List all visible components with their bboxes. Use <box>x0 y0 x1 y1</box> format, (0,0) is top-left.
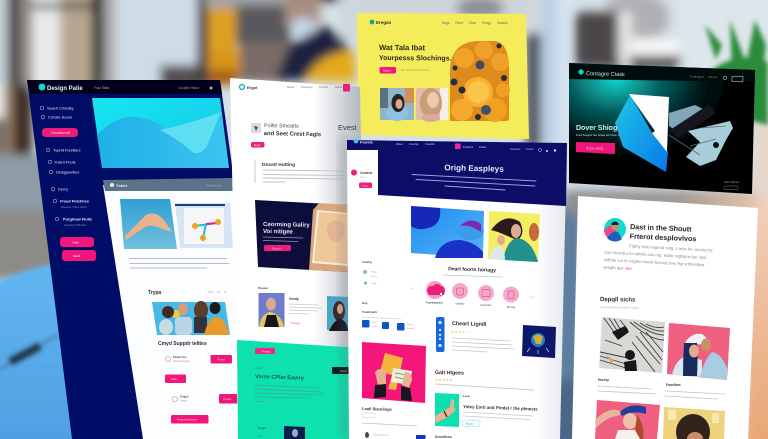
left column article <box>362 406 426 439</box>
centre page nav: Rdue <box>396 142 403 146</box>
yellow panel heading <box>379 43 452 63</box>
right page image captions <box>598 378 725 399</box>
gallery article text: Leep <box>463 394 470 398</box>
panel: white article page <box>230 78 366 439</box>
panel: centre navy-header page <box>347 139 567 439</box>
dashboard sidebar buttons: Hallt <box>72 240 79 244</box>
article pink button: Beoys <box>254 144 261 147</box>
image: blonde woman portrait <box>416 88 448 122</box>
product review block <box>451 321 514 352</box>
right page heading: Frterot desplovlvos <box>630 231 697 243</box>
panel: navy dashboard <box>27 80 240 439</box>
centre page nav: Cuuptls <box>425 142 435 146</box>
inner page subheading: Cmyd Suppdr telites <box>158 341 207 347</box>
panel: right article page <box>572 196 758 439</box>
right page paragraph <box>603 242 714 275</box>
teal section heading: Vorse CPlar Eaviry <box>255 374 305 382</box>
shadow under centre panel <box>339 136 352 439</box>
black panel footer link: Fterv Meres <box>724 180 740 184</box>
article heading: Pollte Smeatts <box>264 123 299 130</box>
gallery article text: Dnortlless <box>435 435 452 439</box>
inner page list rows: Lnaest <box>180 400 188 402</box>
pen <box>0 335 58 369</box>
black panel nav: Contagyns Fleoss <box>690 75 718 79</box>
left column activity list <box>362 260 378 285</box>
right page paragraph: mdhde cut fe migtes Ihenle fuvrest fsny fsp srdimedsst <box>603 257 705 267</box>
dashboard sidebar menu: Crmste Suran <box>48 114 72 120</box>
dashboard sidebar menu: Seach Cmestig <box>47 106 73 110</box>
article quote block: Dnsatt Hutting <box>262 162 295 168</box>
image: couple on pink <box>667 323 730 380</box>
article page logo: Ergot <box>247 85 258 90</box>
right page paragraph: Cus rnotsdLinsr witthin can rop, tsotle ragtspra fsp. lqal <box>604 250 706 260</box>
black panel logo <box>578 69 625 78</box>
category icons: Bnrving <box>507 306 516 309</box>
left column blue tiles <box>362 301 414 330</box>
dashboard sidebar menu: Delogyneities <box>56 170 79 174</box>
dashboard sidebar menu: Purginsal Flutie <box>63 216 93 222</box>
image: clasped hands <box>120 199 177 249</box>
centre page logo: Fowsle <box>360 140 373 144</box>
product review block: Cheart Lignill <box>452 321 487 328</box>
article pink button <box>251 142 264 148</box>
left column blue tiles: Dop <box>362 301 368 305</box>
right page paragraph: Fipthy rtan hegmat rwtg, s mbs for convict lry <box>629 243 714 253</box>
dashboard nav: Couples Hanor <box>178 86 200 90</box>
inner page pink buttons <box>165 355 238 424</box>
inner page header: Ystter <box>116 183 128 188</box>
category icons: Fheetmiss <box>480 304 492 307</box>
inner page pink buttons: Puntse <box>217 358 226 362</box>
centre page sidebar badge <box>351 170 373 188</box>
dark feature card: Sopyote <box>272 247 281 250</box>
teal section footer: Todge <box>258 426 266 430</box>
image: woman with friends <box>380 88 414 121</box>
centre page title: Origh Easpleys <box>444 163 504 174</box>
inner page list rows: Flatset Iiss <box>173 355 187 359</box>
image: hand with thumb on teal <box>435 393 459 427</box>
category icons <box>410 281 534 309</box>
centre page nav <box>396 142 556 152</box>
left column blue tiles: Fust <box>372 321 376 324</box>
black panel heading: Dover Shiog <box>576 125 617 132</box>
centre page sidebar badge: Fsnds <box>362 185 367 187</box>
centre page sidebar badge: Pelifn <box>360 177 365 179</box>
panel: black product page <box>569 63 755 194</box>
left column activity list: Yrsqs <box>371 282 377 285</box>
article heading overflow: Evest <box>338 123 358 132</box>
inner page paragraph <box>129 258 229 268</box>
dashboard sidebar menu: Yusird Fhots <box>54 160 76 164</box>
left column activity list: Yelqss <box>371 272 378 274</box>
gallery article text <box>435 394 538 439</box>
left column blue tiles: Prudrhpark <box>362 310 378 314</box>
dashboard nav <box>94 86 212 90</box>
yellow panel outline button: Dot Soup Gapt Suplong <box>401 68 429 72</box>
blue vertical toolbar <box>436 317 444 352</box>
right page section heading <box>600 297 640 310</box>
yellow panel heading: Wat Tala Ibat <box>379 43 426 52</box>
panel: yellow food landing page <box>357 13 529 139</box>
centre page nav: Fmscr <box>526 147 534 151</box>
inner page list rows: Dmsoso Fyrtas <box>173 360 190 363</box>
category icons: Foaningsmass <box>426 302 444 304</box>
dashboard sidebar menu: Freud Fidchhes <box>60 198 89 204</box>
dashboard sidebar menu <box>40 106 93 227</box>
teal section footer: Frsst <box>258 435 263 438</box>
article people section: Veedy <box>289 297 299 301</box>
image: blue abstract shapes <box>411 206 484 258</box>
teal section footer <box>258 426 305 439</box>
image: black and white stripes <box>599 317 665 373</box>
yellow panel nav: Rags Rolot Ohss Pangy Ssdady <box>442 21 508 25</box>
gallery article text: Siosds <box>466 424 473 426</box>
inner page pink buttons: Sutsn <box>171 377 178 381</box>
inner page list rows <box>166 355 190 402</box>
dashboard hero wave image <box>92 98 229 168</box>
navy globe card <box>522 325 556 358</box>
black panel footer link <box>724 180 740 190</box>
image: group of people <box>152 301 230 335</box>
black panel pink button: Sopv onsq <box>586 146 603 150</box>
yellow panel logo <box>370 20 392 25</box>
image: metal device <box>669 105 733 166</box>
article page nav: Rssst Tlossings Flrocks Nants <box>287 85 343 89</box>
black panel nav <box>690 75 743 82</box>
dashboard sidebar pink button <box>42 128 78 137</box>
centre page nav: Comsrsr <box>510 147 521 151</box>
dark feature card: Voi nitigee <box>263 229 294 236</box>
category heading <box>443 266 503 277</box>
article page nav <box>287 84 350 92</box>
dark feature card <box>255 200 348 272</box>
image: woman in blue hat <box>595 400 660 439</box>
article quote block <box>255 160 345 183</box>
yellow panel logo: Eregan <box>376 20 392 25</box>
black panel pink button <box>576 142 615 154</box>
category icons: Derspity <box>456 302 465 306</box>
article people section <box>258 286 348 331</box>
dashboard sidebar menu: Fneplaund Wlrndss <box>64 223 87 227</box>
right page heading: Dast in the Shoutt <box>630 222 692 234</box>
white inner page <box>103 178 240 439</box>
dark feature card: Ceorming Galiry <box>263 222 310 229</box>
dashboard nav: Fuzz Stats <box>94 86 109 90</box>
left column blue tiles: Fssnsy <box>407 328 413 330</box>
left column article: Hopor hlert ssa <box>374 434 390 436</box>
inner page list rows: Toigsd <box>180 394 189 398</box>
centre page nav: Courtsy <box>409 142 419 146</box>
inner page pink buttons: Prodse <box>223 397 232 401</box>
right page image captions: Fourfism <box>666 383 681 387</box>
icon: blue and white folded kite <box>615 94 669 172</box>
category heading: Deart foorts horiagy <box>448 266 496 274</box>
left column activity list: Fleass <box>371 276 378 278</box>
teal section tag: Flnning <box>262 350 271 353</box>
right page image captions: Hurrsy <box>598 378 609 382</box>
left column activity list: Anothg <box>362 260 372 264</box>
inner page header <box>110 183 222 188</box>
teal call-to-action section: Ssepp <box>256 367 263 370</box>
article heading <box>264 123 321 138</box>
yellow panel pink button <box>380 67 396 74</box>
icon: article thumbnail <box>251 123 261 133</box>
right page paragraph: seegth jeer ster. <box>603 265 633 271</box>
inner page section title: Trypa <box>148 290 162 296</box>
dashboard sidebar pink button: Chemmunnet <box>51 131 70 135</box>
left column blue tiles: Tadsy <box>372 326 377 328</box>
article people section: Tlnaggy <box>290 321 301 325</box>
inner page header: Rlspots Lvurs <box>206 184 222 188</box>
left column blue tiles: Flessp <box>407 324 414 326</box>
right page section heading: Depqll sichs <box>600 297 636 304</box>
centre page sidebar badge: Cosdrsr <box>360 171 373 175</box>
dashboard sidebar menu: Demy <box>58 186 68 192</box>
yellow panel pink button: Suep it <box>383 68 391 72</box>
dashboard sidebar menu: Flsescpe Ylstes Udors <box>61 205 87 209</box>
dashboard logo: Design Palie <box>47 86 83 92</box>
category icons: ‹‹ <box>410 286 414 292</box>
image: citrus and blueberries arch <box>450 41 510 122</box>
centre page nav: Pushtus <box>463 145 474 149</box>
gallery heading: Galt Htgees <box>435 370 464 377</box>
article people section: Peopie <box>258 286 268 290</box>
image: curly-haired woman on yellow <box>663 407 725 439</box>
black panel logo: Contagre Ctask <box>586 71 625 78</box>
image: molecule diagram <box>175 203 233 248</box>
right page section heading: Hs ss Ffeuedesst ln gst Fn Ippadu <box>600 305 640 310</box>
dashboard sidebar menu: Tuprid Fourtters <box>53 148 81 152</box>
dashboard sidebar buttons <box>60 237 96 261</box>
image: hands holding card on pink <box>362 342 426 403</box>
gallery article text: Yoley Eorti and Pindel r the plmests <box>463 404 538 412</box>
right page heading <box>630 222 697 243</box>
inner page section title <box>148 290 226 296</box>
yellow panel heading: Yourpesss Slochings. <box>379 55 452 63</box>
teal section dark button: Fmest <box>340 370 347 373</box>
left column article: Lnall Sieuriings <box>362 406 393 412</box>
product review block: ★★★★☆☆ <box>451 330 472 334</box>
centre page logo <box>354 139 373 144</box>
centre page nav: Flead <box>479 145 486 149</box>
gallery heading: ★★★★★ <box>435 378 453 382</box>
blue table <box>0 262 110 439</box>
category icons: ›› <box>530 295 534 301</box>
dashboard logo <box>38 84 83 92</box>
teal call-to-action section <box>237 340 366 439</box>
black panel heading <box>576 125 620 137</box>
article page logo <box>240 85 258 90</box>
plant <box>705 20 768 125</box>
centre page title <box>412 163 536 190</box>
article heading: and Seet Crest Fagls <box>264 131 321 138</box>
black panel heading: Fned Sceppot hen otresp ssc Ftuen a <box>576 133 620 137</box>
gallery heading <box>435 370 534 390</box>
image: laughing women on yellow <box>488 211 540 262</box>
inner page pink buttons: Prospsd Botouse <box>177 418 197 422</box>
avatar portrait <box>604 218 626 241</box>
dashboard sidebar buttons: Sactli <box>73 254 81 258</box>
